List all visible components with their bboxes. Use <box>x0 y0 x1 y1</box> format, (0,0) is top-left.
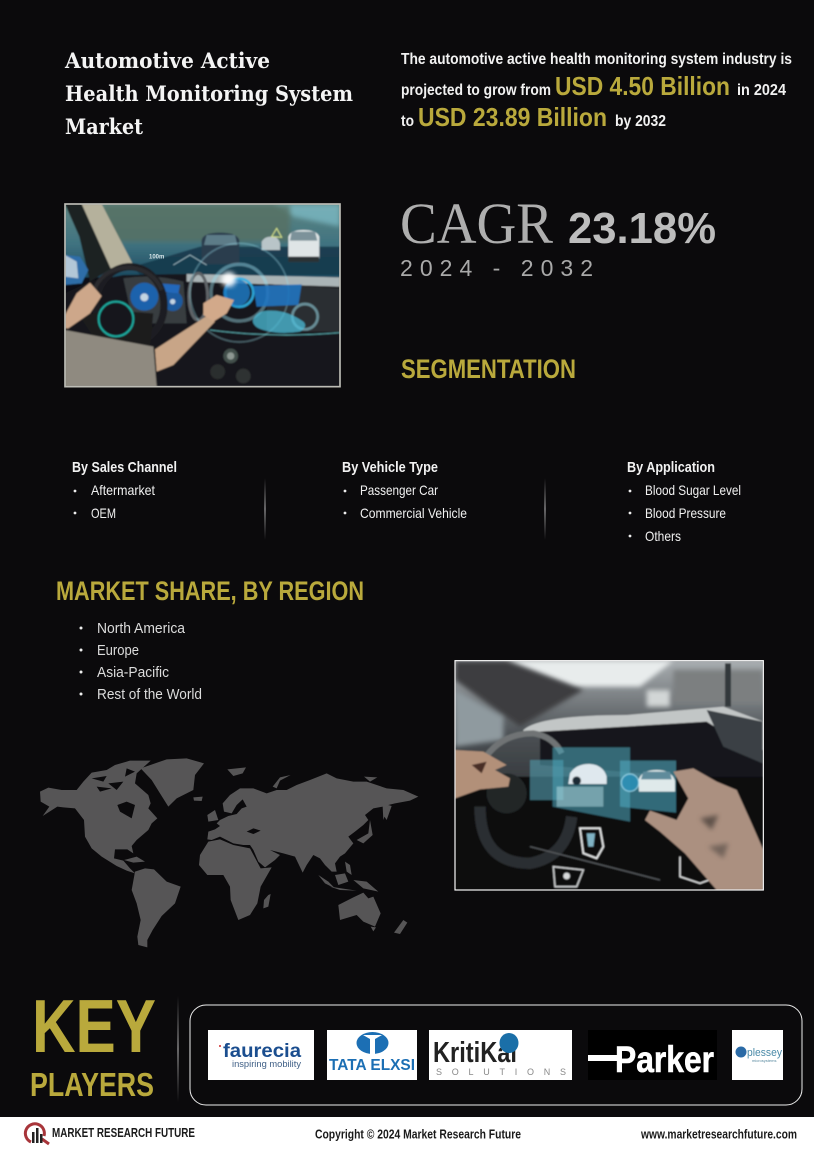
instrument cluster <box>130 283 158 311</box>
segment column: by vehicle type: By Vehicle Type <box>342 459 438 476</box>
sakhalin <box>383 805 392 820</box>
market size statement: to <box>401 113 414 130</box>
philippines <box>345 862 352 875</box>
logo: kritikal solutions <box>429 1030 572 1080</box>
madagascar <box>263 894 271 908</box>
greenland <box>141 758 204 807</box>
logo: plessey: plessey <box>747 1047 782 1059</box>
segment column: by application: Others <box>645 528 681 544</box>
new zealand <box>394 920 407 934</box>
photo: driver touching holographic dashboard <box>65 204 340 387</box>
CAGR period: 2024 - 2032 <box>400 255 593 281</box>
key players panel <box>190 1005 802 1105</box>
japan <box>357 820 373 843</box>
africa <box>199 839 272 920</box>
market size statement: USD 23.89 Billion <box>418 102 607 132</box>
key players heading: KEY <box>32 984 156 1068</box>
logo: kritikal solutions: KritiKal <box>433 1037 517 1069</box>
logo: parker: Parker <box>615 1039 714 1080</box>
title <box>64 48 353 139</box>
logo: plessey: microsystems <box>752 1058 776 1063</box>
australia <box>338 893 381 927</box>
logo: tata elxsi: TATA ELXSI <box>329 1057 415 1074</box>
CAGR value: 23.18% <box>568 204 716 253</box>
arms and body <box>65 330 157 387</box>
steering wheel <box>98 262 168 324</box>
right hand <box>645 768 763 890</box>
segment column: by sales channel: Aftermarket <box>91 482 155 498</box>
segment column: by application <box>627 459 741 544</box>
segment column: by application: By Application <box>627 459 715 476</box>
south america <box>132 868 181 947</box>
logo: faurecia <box>208 1030 314 1080</box>
logo: plessey <box>732 1030 783 1080</box>
market size statement: projected to grow from <box>401 82 551 99</box>
segment column: by vehicle type: Passenger Car <box>360 482 438 498</box>
british isles <box>207 810 218 822</box>
heading: segmentation: SEGMENTATION <box>401 354 576 384</box>
region list: Rest of the World <box>97 686 202 703</box>
tasmania <box>371 927 376 931</box>
segment column: by vehicle type <box>342 459 467 521</box>
photo: hand using transparent car display <box>455 661 763 890</box>
market size statement: USD 4.50 Billion <box>555 71 730 101</box>
segment column: by vehicle type: Commercial Vehicle <box>360 505 467 521</box>
footer: Copyright © 2024 Market Research Future <box>315 1128 521 1142</box>
segment column: by sales channel <box>72 459 177 521</box>
market size statement <box>401 51 792 132</box>
hologram <box>190 243 318 342</box>
region list: Europe <box>97 642 139 659</box>
hudson bay and seas <box>92 768 261 834</box>
region list: North America <box>97 620 186 637</box>
CAGR value: CAGR <box>400 191 553 256</box>
segment column: by sales channel: OEM <box>91 505 116 521</box>
new siberian islands <box>364 777 377 782</box>
logo: faurecia: inspiring mobility <box>232 1059 301 1070</box>
dashboard <box>66 274 266 386</box>
footer: MARKET RESEARCH FUTURE <box>52 1126 195 1140</box>
left hand <box>455 750 510 798</box>
java <box>330 887 357 891</box>
footer <box>0 1117 814 1150</box>
icon: market research future logo <box>25 1124 49 1144</box>
logo: parker <box>588 1030 717 1080</box>
new guinea <box>353 880 378 892</box>
icons <box>580 828 603 858</box>
sumatra <box>318 875 335 888</box>
borneo <box>335 873 348 885</box>
segment column: by application: Blood Sugar Level <box>645 482 741 498</box>
logo: kritikal solutions: SOLUTIONS <box>436 1067 566 1077</box>
vents and knobs <box>189 273 208 320</box>
pillar <box>65 204 112 282</box>
CAGR value <box>400 191 716 256</box>
segment column: by sales channel: By Sales Channel <box>72 459 177 476</box>
market size statement: in 2024 <box>737 82 786 99</box>
heading: market share by region: MARKET SHARE, BY REGION <box>56 576 364 606</box>
segment column: by application: Blood Pressure <box>645 505 726 521</box>
title: Market <box>65 114 143 139</box>
region list <box>80 620 202 703</box>
north america <box>40 761 157 873</box>
caribbean islands <box>124 857 145 863</box>
panels <box>530 760 563 800</box>
iceland <box>227 767 246 776</box>
key players heading: PLAYERS <box>30 1066 154 1103</box>
logo: tata elxsi <box>327 1030 417 1080</box>
novaya zemlya <box>273 775 291 788</box>
photo: driver touching holographic dashboard: 100m <box>149 255 164 261</box>
logo: faurecia: faurecia <box>223 1041 301 1062</box>
eurasia <box>207 773 418 873</box>
title: Health Monitoring System <box>65 81 353 106</box>
svalbard <box>193 797 203 801</box>
market size statement: by 2032 <box>615 113 666 130</box>
key players heading <box>30 984 156 1103</box>
region list: Asia-Pacific <box>97 664 169 681</box>
title: Automotive Active <box>64 48 270 73</box>
world map <box>40 758 418 947</box>
